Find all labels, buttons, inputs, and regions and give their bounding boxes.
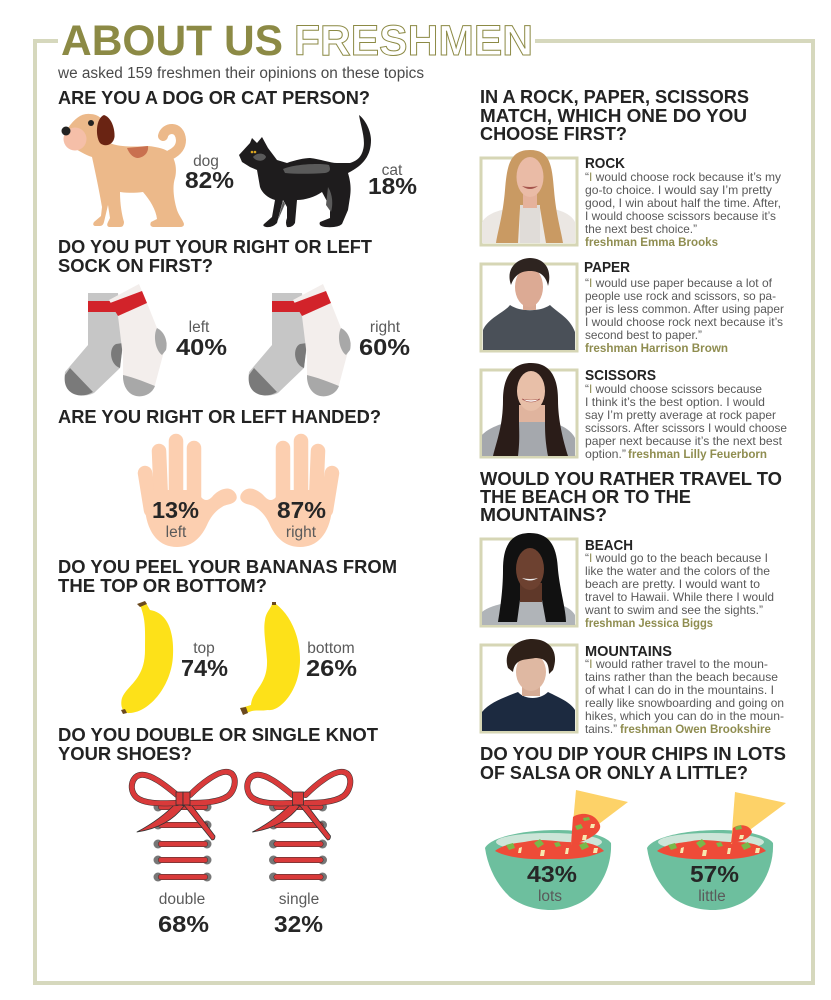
icon: bowl little bbox=[647, 792, 786, 910]
label: single 32%: 32% bbox=[274, 911, 323, 937]
text: beach quote bbox=[584, 537, 774, 630]
photo: Lilly Feuerborn bbox=[481, 363, 577, 457]
text: rock quote: good, I win about half the time. After, bbox=[585, 196, 781, 210]
panel: beach or mountains bbox=[480, 468, 784, 736]
text: scissors quote: SCISSORS bbox=[585, 367, 656, 384]
heading: salsa bbox=[480, 743, 786, 783]
label: left 40% bbox=[176, 319, 227, 360]
label: left 40%: 40% bbox=[176, 334, 227, 360]
text: paper quote: per is less common. After using paper bbox=[585, 302, 784, 316]
text: scissors quote bbox=[585, 367, 787, 461]
text: beach quote: travel to Hawaii. While there I would bbox=[585, 590, 774, 604]
text: paper quote bbox=[584, 259, 784, 355]
heading: bananas: DO YOU PEEL YOUR BANANAS FROM bbox=[58, 556, 397, 577]
label: left 40%: left bbox=[189, 319, 210, 336]
label: right 87%: right bbox=[286, 524, 317, 541]
label: lots 43%: 43% bbox=[527, 861, 577, 887]
label: left 13% bbox=[152, 497, 199, 541]
heading: dog or cat: ARE YOU A DOG OR CAT PERSON? bbox=[58, 87, 370, 108]
heading: rock paper scissors bbox=[480, 86, 749, 144]
title bbox=[61, 17, 533, 65]
heading: socks: SOCK ON FIRST? bbox=[58, 255, 213, 276]
text: rock quote: the next best choice.” bbox=[585, 222, 697, 236]
text: scissors quote: I think it’s the best option. I would bbox=[585, 395, 765, 409]
label: right 87% bbox=[277, 497, 326, 541]
text: beach quote: want to swim and see the sights.” bbox=[584, 603, 763, 617]
label: double 68% bbox=[158, 891, 209, 937]
icon: banana top bbox=[121, 601, 173, 714]
heading: rock paper scissors: MATCH, WHICH ONE DO YOU bbox=[480, 105, 747, 126]
label: double 68%: 68% bbox=[158, 911, 209, 937]
heading: beach or mountains: THE BEACH OR TO THE bbox=[480, 486, 691, 507]
title: FRESHMEN bbox=[294, 17, 533, 65]
label: little 57% bbox=[690, 861, 739, 905]
panel: bananas bbox=[58, 556, 397, 715]
heading: beach or mountains: WOULD YOU RATHER TRAVEL TO bbox=[480, 468, 782, 489]
text: paper quote: people use rock and scissors, so pa- bbox=[585, 289, 776, 303]
text: rock quote: I would choose scissors because it’s bbox=[585, 209, 776, 223]
text: mountains quote: “I would rather travel to the moun- bbox=[585, 657, 768, 671]
label: left 13%: left bbox=[166, 524, 187, 541]
heading: socks: DO YOU PUT YOUR RIGHT OR LEFT bbox=[58, 236, 373, 257]
heading: shoe knots: DO YOU DOUBLE OR SINGLE KNOT bbox=[58, 724, 379, 745]
label: dog 82%: dog bbox=[193, 153, 219, 170]
text: rock quote: freshman Emma Brooks bbox=[585, 235, 718, 249]
text: beach quote: freshman Jessica Biggs bbox=[585, 616, 713, 630]
heading: beach or mountains bbox=[480, 468, 782, 525]
text: mountains quote: hikes, which you can do in the moun- bbox=[585, 709, 784, 723]
icon: left hand bbox=[144, 441, 237, 547]
label: double 68%: double bbox=[159, 891, 205, 908]
label: top 74%: top bbox=[193, 640, 215, 657]
label: single 32% bbox=[274, 891, 323, 937]
text: scissors quote: option.” bbox=[585, 447, 626, 461]
heading: socks bbox=[58, 236, 373, 276]
text: scissors quote: paper next because it’s the next best bbox=[585, 434, 783, 448]
label: dog 82%: 82% bbox=[185, 167, 234, 193]
label: lots 43%: lots bbox=[538, 888, 562, 905]
icon: right hand bbox=[240, 441, 333, 547]
label: cat 18%: cat bbox=[382, 162, 403, 179]
panel: shoe knots bbox=[58, 724, 379, 937]
text: paper quote: “I would use paper because a lot of bbox=[585, 276, 773, 290]
text: beach quote: “I would go to the beach because I bbox=[585, 551, 768, 565]
text: scissors quote: scissors. After scissors I would choose bbox=[585, 421, 787, 435]
icon: dog bbox=[62, 114, 184, 227]
heading: shoe knots: YOUR SHOES? bbox=[58, 743, 192, 764]
label: bottom 26% bbox=[306, 640, 357, 681]
text: paper quote: second best to paper.” bbox=[585, 328, 702, 342]
heading: beach or mountains: MOUNTAINS? bbox=[480, 504, 607, 525]
label: right 60% bbox=[359, 319, 410, 360]
text: rock quote bbox=[585, 155, 781, 249]
icon: cat bbox=[239, 115, 371, 227]
text: rock quote: ROCK bbox=[585, 155, 625, 172]
icon: bowl lots bbox=[485, 790, 628, 910]
text: beach quote: like the water and the colors of the bbox=[585, 564, 770, 578]
label: bottom 26%: bottom bbox=[307, 640, 355, 657]
text: mountains quote: tains rather than the beach because bbox=[585, 670, 778, 684]
text: rock quote: go-to choice. I would say I’m pretty bbox=[585, 183, 772, 197]
text: scissors quote: “I would choose scissors because bbox=[585, 382, 762, 396]
text: mountains quote: really like snowboarding and going on bbox=[585, 696, 784, 710]
heading: shoe knots bbox=[58, 724, 379, 764]
heading: bananas: THE TOP OR BOTTOM? bbox=[58, 575, 267, 596]
photo: Harrison Brown bbox=[481, 258, 577, 351]
label: cat 18%: 18% bbox=[368, 173, 417, 199]
subtitle: we asked 159 freshmen their opinions on these topics bbox=[57, 65, 424, 82]
label: left 13%: 13% bbox=[152, 497, 199, 523]
heading: handedness: ARE YOU RIGHT OR LEFT HANDED? bbox=[58, 406, 381, 427]
panel: rock paper scissors bbox=[480, 86, 787, 461]
text: paper quote: PAPER bbox=[584, 259, 630, 276]
heading: salsa: OF SALSA OR ONLY A LITTLE? bbox=[480, 762, 748, 783]
text: scissors quote: say I’m pretty average at rock paper bbox=[585, 408, 776, 422]
text: beach quote: beach are pretty. I would want to bbox=[585, 577, 760, 591]
text: mountains quote: tains.” bbox=[585, 722, 617, 736]
text: mountains quote bbox=[585, 643, 784, 736]
text: mountains quote: freshman Owen Brookshire bbox=[620, 722, 771, 736]
label: dog 82% bbox=[185, 153, 234, 193]
photo: Jessica Biggs bbox=[481, 533, 577, 626]
icon: right socks bbox=[249, 284, 351, 396]
icon: left socks bbox=[65, 284, 167, 396]
panel: salsa bbox=[480, 743, 786, 910]
icon: double knot laces bbox=[132, 772, 235, 882]
panel: dog or cat bbox=[58, 87, 417, 227]
label: single 32%: single bbox=[279, 891, 319, 908]
heading: salsa: DO YOU DIP YOUR CHIPS IN LOTS bbox=[480, 743, 786, 764]
heading: bananas bbox=[58, 556, 397, 596]
label: cat 18% bbox=[368, 162, 417, 199]
label: bottom 26%: 26% bbox=[306, 655, 357, 681]
heading: rock paper scissors: IN A ROCK, PAPER, SCISSORS bbox=[480, 86, 749, 107]
label: right 87%: 87% bbox=[277, 497, 326, 523]
photo: Owen Brookshire bbox=[481, 639, 577, 732]
label: top 74% bbox=[181, 640, 228, 681]
label: little 57%: 57% bbox=[690, 861, 739, 887]
icon: single knot laces bbox=[247, 772, 350, 882]
label: right 60%: 60% bbox=[359, 334, 410, 360]
text: paper quote: freshman Harrison Brown bbox=[585, 341, 728, 355]
panel: handedness bbox=[58, 406, 381, 547]
label: top 74%: 74% bbox=[181, 655, 228, 681]
icon: banana bottom bbox=[240, 602, 300, 715]
heading: rock paper scissors: CHOOSE FIRST? bbox=[480, 123, 627, 144]
label: right 60%: right bbox=[370, 319, 401, 336]
text: mountains quote: MOUNTAINS bbox=[585, 643, 672, 660]
text: beach quote: BEACH bbox=[585, 537, 633, 554]
label: lots 43% bbox=[527, 861, 577, 905]
label: little 57%: little bbox=[698, 888, 726, 905]
panel: socks bbox=[58, 236, 410, 396]
text: paper quote: I would choose rock next because it’s bbox=[585, 315, 783, 329]
title: ABOUT US bbox=[61, 17, 283, 65]
text: rock quote: “I would choose rock because it’s my bbox=[585, 170, 781, 184]
photo: Emma Brooks bbox=[481, 150, 577, 245]
text: scissors quote: freshman Lilly Feuerborn bbox=[628, 447, 767, 461]
text: mountains quote: of what I can do in the mountains. I bbox=[585, 683, 774, 697]
